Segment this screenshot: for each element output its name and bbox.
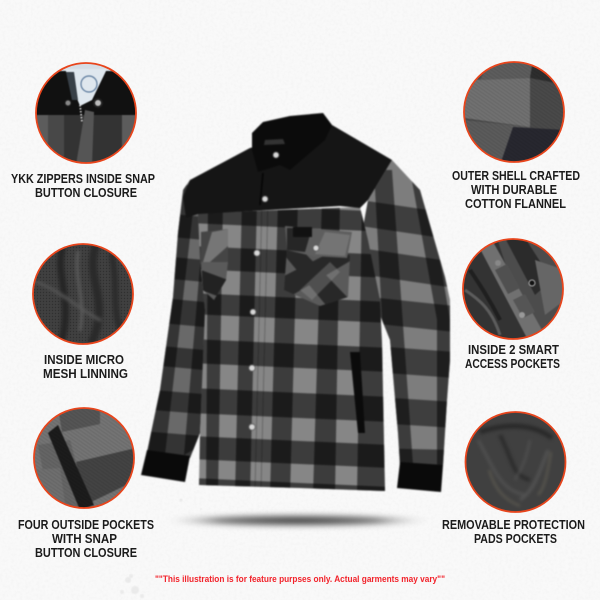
left cuff	[141, 450, 190, 482]
jacket illustration	[140, 113, 455, 500]
circle photo: mesh	[33, 244, 133, 344]
caption: pockets	[465, 343, 560, 371]
panel: protection pads	[442, 412, 585, 546]
circle photo: protection pad pocket	[465, 412, 567, 512]
pocket label	[293, 227, 312, 237]
side zip pocket	[350, 352, 365, 433]
jacket body with plaid	[198, 206, 386, 492]
caption: mesh: MESH LINNING	[43, 367, 128, 381]
caption: zipper: BUTTON CLOSURE	[35, 186, 137, 200]
panel: smart access pockets	[463, 238, 565, 371]
circle photo: zipper	[36, 63, 136, 165]
circle outline	[33, 244, 133, 344]
caption: flannel: COTTON FLANNEL	[465, 197, 566, 211]
caption: flannel: OUTER SHELL CRAFTED	[452, 169, 580, 183]
right sleeve	[363, 160, 451, 466]
left chest pocket	[201, 229, 228, 300]
caption: outside pockets	[18, 518, 154, 560]
circle outline	[463, 239, 563, 339]
right cuff	[397, 462, 443, 492]
circle photo: outside pocket	[30, 408, 136, 510]
snap buttons	[249, 152, 319, 430]
caption: outside pockets: FOUR OUTSIDE POCKETS	[18, 518, 154, 532]
panel: zipper closure	[11, 63, 155, 200]
right chest pocket	[280, 226, 352, 310]
caption: flannel: WITH DURABLE	[471, 183, 557, 197]
circle outline	[464, 62, 564, 162]
panel: outside pockets	[18, 408, 154, 560]
caption: outside pockets: BUTTON CLOSURE	[35, 546, 137, 560]
circle photo: inside pockets	[463, 238, 565, 340]
caption: zipper: YKK ZIPPERS INSIDE SNAP	[11, 172, 155, 186]
caption: pockets: ACCESS POCKETS	[465, 357, 560, 371]
circle photo: flannel	[464, 60, 566, 165]
caption: pockets: INSIDE 2 SMART	[468, 343, 559, 357]
caption: mesh	[43, 353, 128, 381]
disclaimer note: ""This illustration is for feature purpses only. Actual garments may vary""	[155, 574, 445, 584]
caption: protection pads	[442, 518, 585, 546]
caption: mesh: INSIDE MICRO	[44, 353, 124, 367]
caption: protection pads: PADS POCKETS	[474, 532, 557, 546]
black corduroy yoke	[183, 125, 392, 218]
panel: cotton flannel	[452, 60, 580, 211]
collar	[252, 113, 332, 205]
left sleeve	[146, 180, 206, 458]
ground shadow under jacket	[163, 514, 433, 528]
panel: micro mesh lining	[33, 244, 133, 381]
caption: zipper	[11, 172, 155, 200]
circle outline	[466, 412, 566, 512]
caption: flannel	[452, 169, 580, 211]
circle outline	[36, 63, 136, 163]
caption: outside pockets: WITH SNAP	[52, 532, 117, 546]
circle outline	[34, 408, 134, 508]
